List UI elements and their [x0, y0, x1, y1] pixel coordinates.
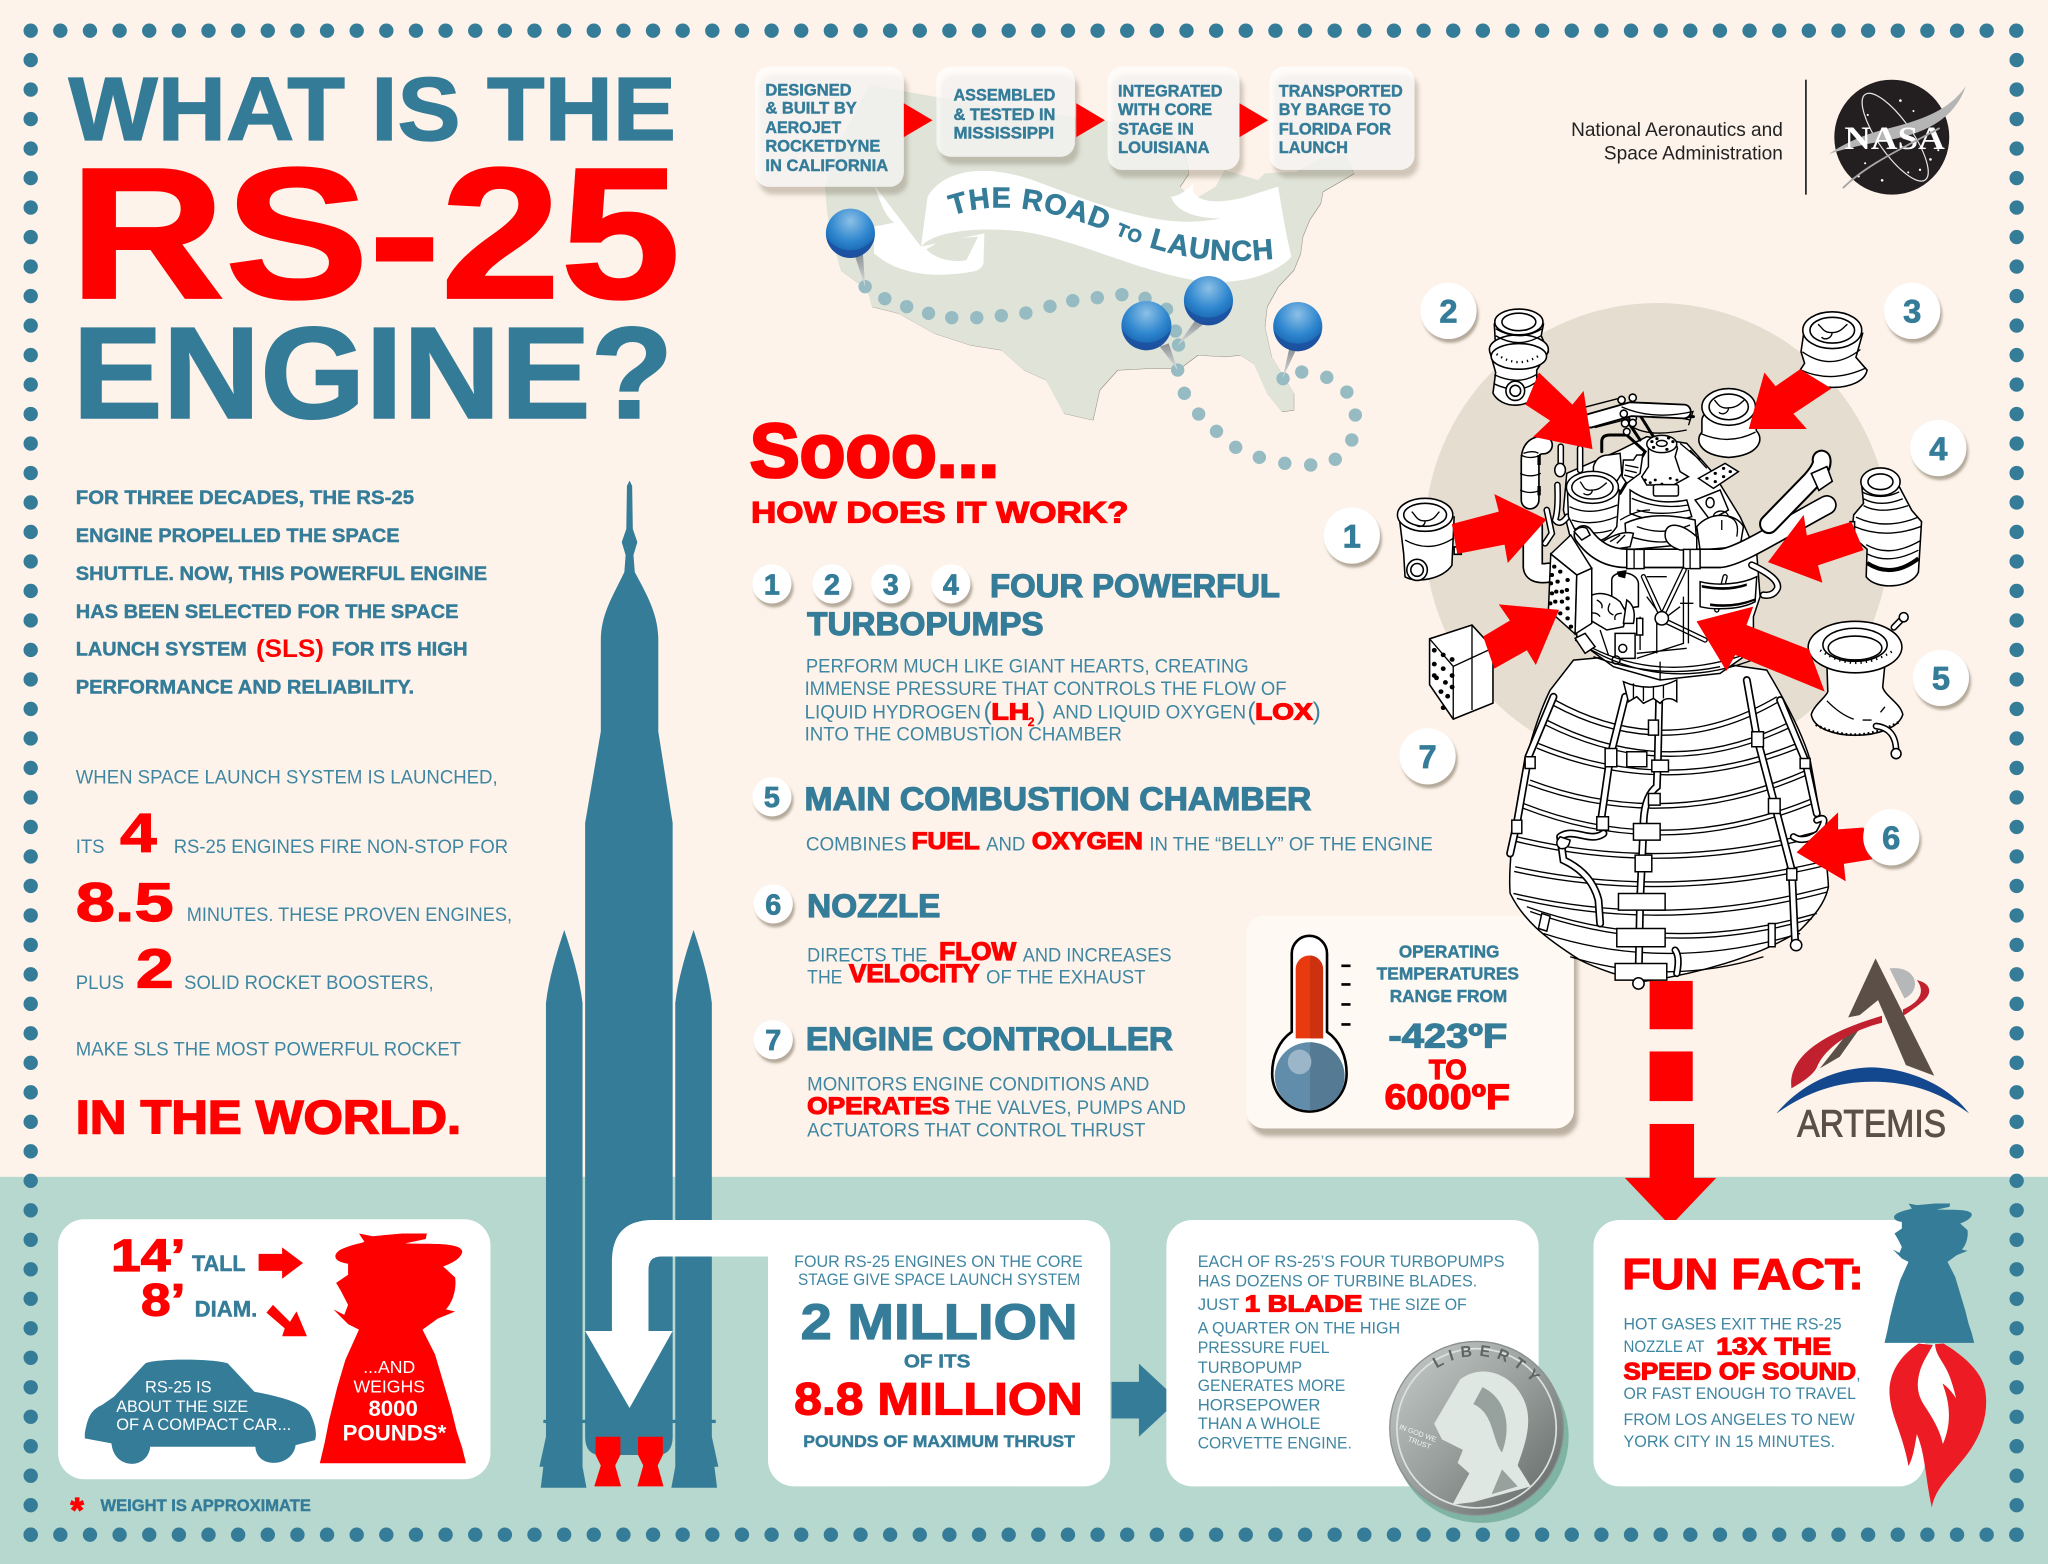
engine machinery: [1520, 410, 1827, 703]
intro paragraph: (SLS): [256, 636, 324, 663]
panel: engine size: 8’: [141, 1274, 185, 1325]
launch facts paragraph: IN THE WORLD.: [76, 1091, 461, 1144]
section: turbopumps: IMMENSE PRESSURE THAT CONTROLS THE FLOW OF: [805, 679, 1287, 700]
intro paragraph: HAS BEEN SELECTED FOR THE SPACE: [76, 601, 458, 623]
rocket silhouette: [539, 481, 718, 1488]
title: RS-25: [69, 129, 680, 338]
section: nozzle: VELOCITY: [849, 961, 980, 988]
section: nozzle: FLOW: [939, 939, 1017, 966]
engine part number badges: 6: [1882, 819, 1900, 856]
road step cards: MISSISSIPPI: [953, 123, 1054, 142]
section: turbopumps: LOX: [1255, 699, 1313, 725]
panel: turbine blade: THAN A WHOLE: [1198, 1414, 1320, 1433]
panel: turbine blade: PRESSURE FUEL: [1198, 1338, 1330, 1357]
launch facts paragraph: WHEN SPACE LAUNCH SYSTEM IS LAUNCHED,: [76, 768, 498, 789]
dashed red arrow from engine to fun fact: [1625, 981, 1716, 1226]
temperature card: [1246, 916, 1574, 1129]
section: turbopumps: 2: [824, 569, 840, 601]
standalone turbopump 2: [1489, 309, 1548, 405]
central pump: [1620, 435, 1692, 521]
section: engine controller: 7: [765, 1025, 781, 1057]
launch facts paragraph: MAKE SLS THE MOST POWERFUL ROCKET: [76, 1039, 461, 1060]
section: nozzle: 6: [765, 889, 781, 921]
section: turbopumps: 2: [1028, 716, 1035, 729]
panel: fun fact: YORK CITY IN 15 MINUTES.: [1624, 1432, 1835, 1451]
temperature card: RANGE FROM: [1390, 986, 1507, 1006]
section: turbopumps: LH: [991, 699, 1029, 725]
panel: fun fact: FUN FACT:: [1622, 1251, 1864, 1299]
section: turbopumps: AND LIQUID OXYGEN: [1053, 702, 1246, 723]
panel: engine size: [58, 1219, 490, 1479]
quarter coin: IN GOD WE: [1398, 1423, 1438, 1444]
section: engine controller: OPERATES: [807, 1093, 950, 1120]
temperature card: TO: [1429, 1054, 1467, 1085]
nozzle coolant tubes: [1510, 680, 1824, 989]
quarter coin: LIBERTY: [1432, 1345, 1540, 1380]
section: engine controller: MONITORS ENGINE CONDITIONS AND: [807, 1075, 1149, 1096]
NASA logo: NASA: [1844, 121, 1945, 157]
section: main combustion chamber: IN THE “BELLY” OF THE ENGINE: [1149, 834, 1433, 855]
section: engine controller: ENGINE CONTROLLER: [806, 1020, 1173, 1057]
road step cards: & BUILT BY: [765, 99, 857, 118]
road step cards: IN CALIFORNIA: [765, 156, 888, 175]
launch facts paragraph: 8.5: [76, 871, 174, 933]
bottom mint band: [0, 1177, 2048, 1564]
temperature card: -423ºF: [1388, 1018, 1507, 1056]
main hot-gas pipe: [1574, 505, 1827, 569]
intro paragraph: SHUTTLE. NOW, THIS POWERFUL ENGINE: [76, 563, 487, 585]
panel: fun fact: FROM LOS ANGELES TO NEW: [1624, 1410, 1855, 1429]
standalone turbopump 4: [1850, 468, 1922, 586]
compact car: OF A COMPACT CAR...: [116, 1415, 291, 1434]
panel: engine size: 14’: [111, 1230, 185, 1281]
panel: fun fact: OR FAST ENOUGH TO TRAVEL: [1624, 1384, 1856, 1403]
RS-25 engine illustration: [1397, 309, 1922, 989]
engine part number badges: 1: [1343, 517, 1361, 554]
standalone engine controller: [1430, 625, 1493, 719]
panel: thrust: OF ITS: [904, 1351, 970, 1372]
road step cards: WITH CORE: [1118, 100, 1212, 119]
NASA logo: [1829, 80, 1966, 195]
red engine silhouette: 8000: [368, 1396, 418, 1421]
road step cards: DESIGNED: [765, 80, 852, 99]
road step cards: STAGE IN: [1118, 120, 1194, 139]
intro paragraph: [76, 487, 487, 699]
road step cards: TRANSPORTED: [1279, 82, 1403, 101]
panel: engine size: TALL: [192, 1251, 246, 1276]
road step cards: BY BARGE TO: [1279, 100, 1391, 119]
base manifold: [1575, 633, 1757, 703]
NASA identity: National Aeronautics and: [1571, 120, 1783, 141]
how does it work heading: Sooo...: [750, 409, 999, 494]
footnote: *: [71, 1492, 85, 1530]
dome under central pump: [1600, 516, 1697, 550]
turbopump in place: top right: [1699, 389, 1760, 457]
section: turbopumps: ): [1037, 699, 1045, 726]
section: main combustion chamber: COMBINES: [806, 834, 906, 855]
panel: turbine blade: HORSEPOWER: [1198, 1396, 1320, 1415]
quarter coin: [1389, 1340, 1569, 1523]
red engine silhouette: POUNDS*: [343, 1421, 447, 1446]
panel: fun fact: 13X THE: [1716, 1333, 1831, 1360]
NASA identity: Space Administration: [1604, 143, 1783, 164]
panel: thrust: [768, 1220, 1110, 1486]
section: turbopumps: 1: [764, 569, 780, 601]
launch facts paragraph: [76, 768, 512, 1144]
red engine silhouette: WEIGHS: [353, 1376, 425, 1396]
section: main combustion chamber: 5: [764, 782, 780, 814]
intro paragraph: FOR ITS HIGH: [332, 639, 468, 661]
top centre pipes: [1593, 410, 1707, 493]
controller in place: [1548, 535, 1592, 634]
intro paragraph: LAUNCH SYSTEM: [76, 639, 247, 661]
section: nozzle: [754, 884, 1172, 989]
section: turbopumps: FOUR POWERFUL: [990, 567, 1280, 604]
road step cards: AEROJET: [765, 118, 842, 137]
left turbopump in place: [1566, 471, 1619, 541]
panel: turbine blade: 1 BLADE: [1245, 1290, 1362, 1316]
road to launch: US map: [825, 85, 1362, 472]
section: engine controller: ACTUATORS THAT CONTROL THRUST: [807, 1120, 1146, 1141]
section: engine controller: THE VALVES, PUMPS AND: [955, 1098, 1186, 1119]
red engine silhouette: ...AND: [363, 1357, 415, 1377]
white arrow from rocket engines to thrust card: [585, 1220, 797, 1408]
road banner ribbon: [874, 171, 1291, 282]
engine part number badges: 2: [1439, 293, 1458, 330]
top pipes, standalone parts and callouts: [1397, 309, 1922, 881]
temperature card: 6000ºF: [1384, 1078, 1510, 1117]
perforated plate: [1695, 463, 1738, 520]
panel: turbine blade: CORVETTE ENGINE.: [1198, 1434, 1352, 1453]
struts and valves: [1583, 565, 1778, 664]
launch facts paragraph: MINUTES. THESE PROVEN ENGINES,: [187, 905, 512, 926]
compact car: [85, 1360, 316, 1464]
panel: turbine blade: GENERATES MORE: [1198, 1376, 1345, 1395]
top pipe: [1586, 394, 1693, 428]
section: nozzle: AND INCREASES: [1023, 945, 1172, 966]
the road to launch banner title: THE ROAD TO LAUNCH: [946, 187, 1272, 262]
intro paragraph: ENGINE PROPELLED THE SPACE: [76, 525, 400, 547]
launch facts paragraph: 2: [136, 937, 174, 999]
engine part number badges: 3: [1903, 293, 1921, 330]
panel: turbine blade: HAS DOZENS OF TURBINE BLADES.: [1198, 1272, 1477, 1291]
section: main combustion chamber: [752, 777, 1433, 855]
panel: thrust: 8.8 MILLION: [794, 1374, 1083, 1425]
road step arrows: [904, 103, 1268, 137]
footnote: [71, 1492, 311, 1530]
red callout arrows: [1452, 369, 1872, 881]
panel: turbine blade: EACH OF RS-25’S FOUR TURBOPUMPS: [1198, 1252, 1505, 1271]
panel: turbine blade: [1166, 1220, 1569, 1523]
launch facts paragraph: RS-25 ENGINES FIRE NON-STOP FOR: [174, 837, 508, 858]
launch facts paragraph: 4: [120, 802, 157, 864]
panel: thrust: FOUR RS-25 ENGINES ON THE CORE: [794, 1253, 1083, 1271]
sphere unit right: [1697, 511, 1743, 550]
panel: fun fact: SPEED OF SOUND: [1624, 1358, 1856, 1385]
panel: fun fact: ,: [1856, 1364, 1861, 1383]
road step cards: & TESTED IN: [953, 105, 1055, 124]
quarter coin: TRUST: [1407, 1435, 1432, 1451]
temperature card: OPERATING: [1399, 941, 1499, 961]
road step cards: [755, 67, 1415, 187]
section: turbopumps: PERFORM MUCH LIKE GIANT HEARTS, CREATING: [806, 657, 1249, 678]
compact car: RS-25 IS: [145, 1377, 212, 1396]
section: turbopumps: (: [1247, 699, 1256, 726]
map pins: [826, 209, 1322, 378]
section: nozzle: NOZZLE: [807, 887, 940, 924]
thermometer icon: [1272, 936, 1351, 1112]
arrow to diameter: [266, 1305, 307, 1336]
Artemis logo: ARTEMIS: [1797, 1103, 1946, 1145]
rocket engine nozzles: [594, 1437, 664, 1486]
section: main combustion chamber: MAIN COMBUSTION CHAMBER: [805, 780, 1311, 817]
title: WHAT IS THE: [69, 59, 676, 160]
intro paragraph: FOR THREE DECADES, THE RS-25: [76, 487, 414, 509]
panel: turbine blade: A QUARTER ON THE HIGH: [1198, 1319, 1400, 1338]
arrow to height: [259, 1247, 303, 1279]
section: main combustion chamber: AND: [986, 834, 1025, 855]
road step cards: INTEGRATED: [1118, 82, 1223, 101]
section: turbopumps: [752, 564, 1321, 746]
launch facts paragraph: PLUS: [76, 973, 124, 994]
section: nozzle: DIRECTS THE: [807, 945, 927, 966]
section: turbopumps: ): [1313, 699, 1321, 726]
road step cards: LOUISIANA: [1118, 138, 1209, 157]
panel: thrust: POUNDS OF MAXIMUM THRUST: [803, 1433, 1075, 1451]
title: [69, 59, 680, 446]
panel: fun fact: NOZZLE AT: [1624, 1337, 1704, 1356]
section: engine controller: [754, 1020, 1186, 1141]
engine part number badges: 4: [1929, 430, 1947, 467]
road step cards: FLORIDA FOR: [1279, 120, 1391, 139]
road route dots: [858, 280, 1362, 472]
launch facts paragraph: SOLID ROCKET BOOSTERS,: [184, 973, 434, 994]
section: main combustion chamber: FUEL: [912, 828, 980, 855]
upper-right elbow pipe: [1769, 460, 1832, 524]
engine part number badges: 7: [1419, 738, 1437, 775]
section: turbopumps: 3: [883, 569, 899, 601]
compact car: ABOUT THE SIZE: [116, 1397, 248, 1416]
arrow: thrust to turbine: [1112, 1364, 1178, 1437]
section: turbopumps: INTO THE COMBUSTION CHAMBER: [805, 725, 1122, 746]
panel: thrust: 2 MILLION: [801, 1294, 1078, 1350]
panel: fun fact: HOT GASES EXIT THE RS-25: [1624, 1315, 1842, 1334]
road step cards: ASSEMBLED: [953, 86, 1055, 105]
NASA identity: [1571, 80, 1966, 195]
section: turbopumps: TURBOPUMPS: [807, 605, 1044, 642]
section: nozzle: OF THE EXHAUST: [986, 968, 1146, 989]
Artemis logo: [1777, 958, 1969, 1145]
panel: turbine blade: JUST: [1198, 1295, 1240, 1314]
how does it work heading: HOW DOES IT WORK?: [751, 496, 1128, 529]
intro paragraph: PERFORMANCE AND RELIABILITY.: [76, 677, 414, 699]
road step cards: ROCKETDYNE: [765, 137, 880, 156]
section: nozzle: THE: [807, 968, 842, 989]
standalone turbopump 1: [1397, 498, 1461, 580]
temperature card: TEMPERATURES: [1377, 964, 1519, 984]
title: ENGINE?: [72, 300, 673, 446]
how does it work heading: [750, 409, 1128, 529]
road step cards: LAUNCH: [1279, 138, 1348, 157]
teal engine and flame: [1885, 1203, 1986, 1507]
standalone combustion chamber: [1808, 613, 1908, 759]
panel: turbine blade: THE SIZE OF: [1369, 1295, 1467, 1314]
launch facts paragraph: ITS: [76, 837, 104, 858]
panel: turbine blade: TURBOPUMP: [1198, 1358, 1302, 1377]
panel: fun fact: [1593, 1203, 1986, 1507]
footnote: WEIGHT IS APPROXIMATE: [101, 1497, 311, 1515]
standalone turbopump 3: [1800, 312, 1867, 387]
red engine silhouette: [320, 1233, 466, 1463]
panel: engine size: DIAM.: [195, 1297, 257, 1322]
section: turbopumps: (: [984, 699, 993, 726]
engine part number badges: [1324, 283, 1969, 865]
nozzle bell: [1510, 657, 1828, 989]
section: turbopumps: 4: [943, 569, 959, 601]
engine backdrop circle: [1425, 303, 1890, 768]
section: turbopumps: LIQUID HYDROGEN: [805, 702, 981, 723]
panel: thrust: STAGE GIVE SPACE LAUNCH SYSTEM: [798, 1271, 1080, 1289]
section: main combustion chamber: OXYGEN: [1032, 828, 1143, 855]
left loop pipe: [1520, 445, 1580, 573]
engine part number badges: 5: [1932, 660, 1950, 697]
